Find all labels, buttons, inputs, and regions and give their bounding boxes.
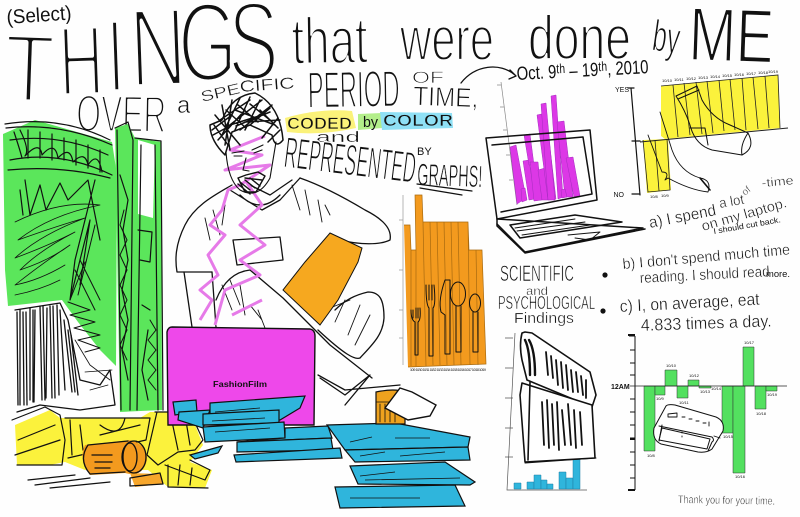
- orange bars: [404, 195, 486, 367]
- title word: things: [2, 0, 279, 124]
- title word: that: that: [291, 3, 368, 78]
- bar date labels: 10/11: [679, 400, 689, 405]
- heading: coded by color: by: [363, 114, 378, 131]
- icon: open book: [520, 332, 596, 463]
- face: [226, 142, 276, 194]
- bar date labels: 10/9: [656, 396, 665, 401]
- green bars: [644, 347, 777, 473]
- second line: over a specific period of time: [76, 60, 479, 145]
- text: finding a: on my laptop.: [699, 194, 788, 234]
- title word: things: I: [105, 0, 127, 115]
- text: finding a: [648, 173, 795, 236]
- heading: coded by color: CODED: [287, 114, 352, 133]
- chart axis labels: YES: [615, 87, 629, 94]
- icon: alarm clock: [654, 405, 723, 452]
- magenta laptop: [167, 327, 315, 425]
- text: finding a: I should cut back.: [713, 215, 781, 236]
- heading: coded by color: COLOR: [383, 111, 453, 130]
- bar date labels: 10/13: [698, 75, 709, 80]
- blue bars: [514, 452, 580, 489]
- bar date labels: 10/14: [710, 74, 721, 79]
- second line: over a specific period of time: TIME,: [413, 81, 479, 113]
- text: finding c: c) I, on average, eat: [619, 290, 760, 316]
- text: finding b: b) I don't spend much time: [622, 241, 791, 273]
- heading: scientific and psychological findings: Findings: [514, 310, 574, 327]
- text: finding a: a) I spend: [648, 202, 718, 232]
- heading: coded by color: [285, 110, 453, 146]
- bar date labels: 10/15: [723, 434, 734, 439]
- bar date labels: 10/13: [700, 389, 711, 394]
- bar date labels: 10/9 10/10 10/11 10/12 10/13 10/14 10/15 10/16 10/17 10/18 10/19: [410, 368, 486, 372]
- orange cylinder and lid: [82, 440, 163, 487]
- dates: Oct. 9ᵗʰ – 19ᵗʰ, 2010: [516, 57, 649, 85]
- title word: done: done: [528, 4, 631, 73]
- label: 12am: 12AM: [611, 384, 630, 391]
- bar date labels: 10/14: [711, 386, 722, 391]
- bar date labels: 10/12: [689, 373, 700, 378]
- thank you note: Thank you for your time.: [678, 494, 775, 508]
- title word: were: were: [399, 5, 494, 74]
- heading: coded by color: and: [316, 129, 360, 146]
- bar date labels: 10/8: [650, 194, 659, 199]
- text: finding b: reading. I should read: [639, 263, 770, 287]
- second line: over a specific period of time: a: [177, 92, 191, 119]
- heading: scientific and psychological findings: SCIENTIFIC: [500, 261, 574, 286]
- chart: reading yes no: [614, 69, 788, 199]
- heading: represented by graphs: [282, 128, 483, 195]
- bar date labels: 10/15: [722, 73, 733, 78]
- heading: represented by graphs: REPRESENTED: [282, 128, 419, 193]
- chart axis: [505, 333, 587, 490]
- second line: over a specific period of time: OVER: [76, 85, 167, 145]
- second line: over a specific period of time: OF: [412, 68, 444, 87]
- chart axis: [497, 82, 517, 205]
- person: [176, 93, 400, 405]
- second line: over a specific period of time: CIFIC: [239, 75, 295, 96]
- text: finding c: 4.833 times a day.: [640, 311, 772, 335]
- title word: by: by: [650, 11, 683, 64]
- subtitle word: select: (Select): [6, 3, 72, 29]
- panel: green bookshelf: [3, 120, 163, 412]
- title: [2, 0, 775, 145]
- yellow bars: [661, 75, 780, 139]
- icon: cutlery: [411, 280, 480, 356]
- person t-shirt hatching: [205, 185, 370, 345]
- bar date labels: 10/19: [767, 392, 778, 397]
- laptop logo: FashionFilm: [213, 380, 267, 389]
- heading: scientific and psychological findings: [498, 261, 595, 327]
- bar date labels: [650, 69, 779, 199]
- hair: [210, 93, 283, 155]
- text: finding a: of: [740, 184, 753, 198]
- orange shorts: [283, 233, 362, 325]
- icon: laptop outline: [486, 130, 645, 253]
- bar date labels: 10/17: [744, 340, 755, 345]
- second line: over a specific period of time: SPE: [199, 80, 242, 106]
- text: finding b: [622, 241, 791, 287]
- text: finding a: a lot: [718, 191, 745, 211]
- magenta scribble trace: [200, 136, 270, 325]
- yellow clothes pile: [12, 407, 212, 488]
- bar date labels: 10/10: [662, 78, 673, 83]
- heading: scientific and psychological findings: PSYCHOLOGICAL: [498, 293, 595, 313]
- bar date labels: 10/18: [758, 70, 769, 75]
- title word: things: T: [2, 15, 56, 124]
- chart axis: [399, 195, 403, 365]
- bar date labels: 10/18: [756, 411, 767, 416]
- chart: laptop hours: [497, 82, 580, 205]
- bar date labels: 10/9: [661, 193, 670, 198]
- magenta bars: [510, 95, 580, 204]
- bar date labels: 10/16: [735, 474, 746, 479]
- foot: [385, 388, 436, 420]
- chart axis: [629, 336, 635, 490]
- bar date labels: 10/16: [734, 72, 745, 77]
- title word: things: H: [57, 4, 105, 118]
- text: finding c: [619, 290, 772, 335]
- arrow to dates: [461, 67, 516, 83]
- chart: blue reading bars with book: [505, 332, 596, 490]
- heading: represented by graphs: BY: [417, 146, 432, 158]
- text: GRAPHS!: [417, 157, 483, 194]
- bar date labels: 10/17: [746, 71, 757, 76]
- heading: scientific and psychological findings: and: [526, 284, 548, 298]
- icon: tree stump: [15, 303, 115, 412]
- bar date labels: 10/11: [674, 77, 684, 82]
- chart: green sleep bars with clock: [611, 335, 787, 490]
- text: finding a: -time: [761, 173, 795, 190]
- chart: reading yes no: NO: [614, 192, 625, 199]
- text: finding b: more.: [766, 269, 790, 279]
- bar date labels: 10/19: [768, 69, 779, 74]
- jar: [376, 390, 405, 424]
- bullets: [600, 272, 608, 314]
- bar date labels: 10/10: [666, 363, 677, 368]
- blue stacks of books: [173, 396, 475, 508]
- second line: over a specific period of time: PERIOD: [307, 60, 400, 120]
- bar date labels: [647, 340, 778, 479]
- baseline: [630, 385, 787, 387]
- bar date labels: 10/12: [686, 76, 697, 81]
- bar date labels: 10/8: [647, 453, 656, 458]
- icon: sock and foot: [648, 86, 751, 192]
- chart: orange eating bars with cutlery: [399, 195, 486, 372]
- person body outline: [176, 178, 400, 405]
